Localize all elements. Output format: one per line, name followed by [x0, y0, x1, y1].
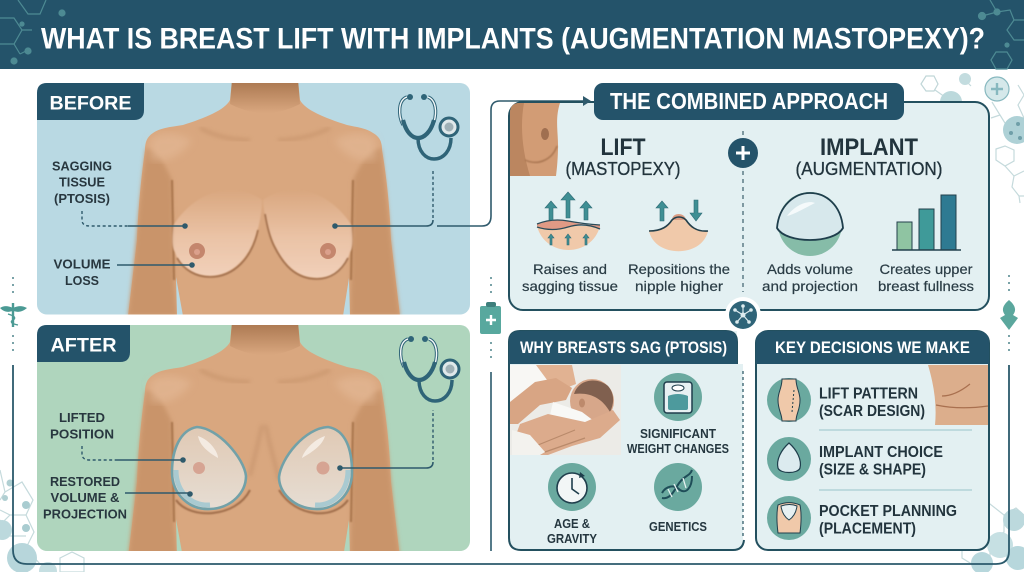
caption: significant weight changes: SIGNIFICANT [640, 426, 716, 441]
text: lift pattern [819, 386, 925, 420]
caption: repositions the nipple higher: nipple higher [635, 278, 723, 294]
icon: dna helix [654, 463, 702, 511]
heading: key decisions we make: KEY DECISIONS WE MAKE [775, 338, 970, 357]
icon: clock [548, 463, 596, 511]
icon: implant dome [777, 192, 843, 256]
text: lift pattern: (SCAR DESIGN) [819, 403, 925, 420]
heading: before [37, 83, 144, 120]
icon: plus [728, 131, 758, 292]
panel: after [37, 322, 470, 558]
icon: implant choice [767, 437, 811, 481]
implant heading [796, 134, 942, 179]
text: implant choice [819, 444, 943, 478]
text: implant choice: (SIZE & SHAPE) [819, 462, 926, 478]
lift heading: LIFT [600, 134, 646, 161]
text: pocket planning: POCKET PLANNING [819, 503, 957, 520]
connector: before to combined approach [332, 101, 588, 229]
text: pocket planning: (PLACEMENT) [819, 520, 916, 538]
panel: key decisions we make [756, 331, 989, 550]
icon: weight scale [654, 373, 702, 421]
panel: the combined approach [509, 83, 989, 310]
caption: age and gravity [547, 516, 597, 546]
caption: age and gravity: AGE & [554, 516, 590, 531]
caption: repositions the nipple higher [628, 261, 730, 294]
heading: after [37, 325, 130, 362]
connector: after callout to stethoscope [337, 410, 433, 471]
callout: restored volume and projection: RESTORED [50, 474, 120, 489]
arrow: into combined approach heading [583, 96, 591, 106]
caption: raises and sagging tissue [522, 261, 618, 294]
callout: sagging tissue: (PTOSIS) [54, 191, 110, 206]
torso illustration: before [128, 80, 400, 316]
implant overlay: right [279, 427, 352, 509]
callout: lifted position: POSITION [50, 426, 114, 442]
outer frame line [13, 365, 1009, 564]
callout: restored volume and projection: PROJECTION [43, 506, 127, 522]
callout: volume loss: VOLUME [54, 256, 111, 272]
decorative molecule pattern: top right [921, 73, 1024, 203]
caption: repositions the nipple higher: Repositions the [628, 261, 730, 277]
callout: lifted position [50, 410, 186, 463]
photo: mother feeding baby [510, 365, 621, 455]
callout: sagging tissue: TISSUE [59, 174, 105, 190]
heading: why breasts sag: WHY BREASTS SAG (PTOSIS) [520, 338, 727, 357]
callout: sagging tissue [52, 158, 188, 229]
icon: stethoscope (before) [400, 94, 458, 159]
caption: raises and sagging tissue: Raises and [533, 261, 607, 277]
icon: pocket planning [767, 496, 811, 540]
heading: why breasts sag [509, 331, 737, 364]
decorative molecule pattern: bottom left [0, 470, 84, 572]
callout: restored volume and projection [43, 474, 193, 522]
caption: creates upper breast fullness: breast fullness [878, 278, 974, 294]
icon: reposition nipple [649, 200, 708, 251]
callout: restored volume and projection: VOLUME & [50, 490, 120, 505]
icon: stethoscope (after) [401, 336, 459, 401]
heading: the combined approach: THE COMBINED APPROACH [610, 88, 888, 114]
left dotted rail with caduceus icon [0, 277, 27, 354]
caption: adds volume and projection: and projection [762, 278, 858, 294]
text: lift pattern: LIFT PATTERN [819, 386, 918, 402]
caption: significant weight changes [627, 426, 729, 456]
decorative molecule pattern: bottom right [962, 504, 1024, 572]
implant overlay: left [172, 427, 246, 509]
right dotted rail with icon [1000, 275, 1018, 354]
text: implant choice: IMPLANT CHOICE [819, 444, 943, 461]
caption: age and gravity: GRAVITY [547, 531, 597, 546]
implant heading: IMPLANT [820, 134, 918, 161]
icon: bar chart [892, 195, 961, 250]
callout: volume loss: LOSS [65, 273, 99, 288]
caption: raises and sagging tissue: sagging tissue [522, 278, 618, 294]
caption: creates upper breast fullness: Creates upper [880, 261, 973, 277]
caption: adds volume and projection [762, 261, 858, 294]
icon: network node [725, 297, 761, 333]
caption: creates upper breast fullness [878, 261, 974, 294]
heading: key decisions we make [756, 331, 989, 364]
caption: adds volume and projection: Adds volume [767, 261, 853, 277]
icon: raise tissue [537, 192, 600, 250]
photo: torso side view [510, 103, 560, 176]
heading: before: BEFORE [50, 94, 132, 114]
callout: sagging tissue: SAGGING [52, 158, 112, 174]
panel: why breasts sag [509, 331, 744, 550]
torso illustration: after [128, 322, 400, 558]
text: pocket planning [819, 503, 957, 538]
heading: the combined approach [594, 83, 904, 120]
lift heading [566, 134, 680, 179]
callout: volume loss [54, 256, 195, 288]
panel: before [37, 80, 470, 316]
caption: significant weight changes: WEIGHT CHANGES [627, 441, 729, 456]
icon: lift pattern [767, 378, 811, 422]
callout: lifted position: LIFTED [59, 410, 105, 425]
caption: genetics: GENETICS [649, 519, 707, 534]
lift heading: (MASTOPEXY) [566, 159, 680, 179]
photo: scar [928, 365, 988, 425]
middle dotted rail with clipboard icon [480, 277, 501, 551]
heading: after: AFTER [50, 336, 117, 356]
title banner [0, 0, 1024, 69]
implant heading: (AUGMENTATION) [796, 159, 942, 179]
panel divider dashes [742, 371, 744, 538]
